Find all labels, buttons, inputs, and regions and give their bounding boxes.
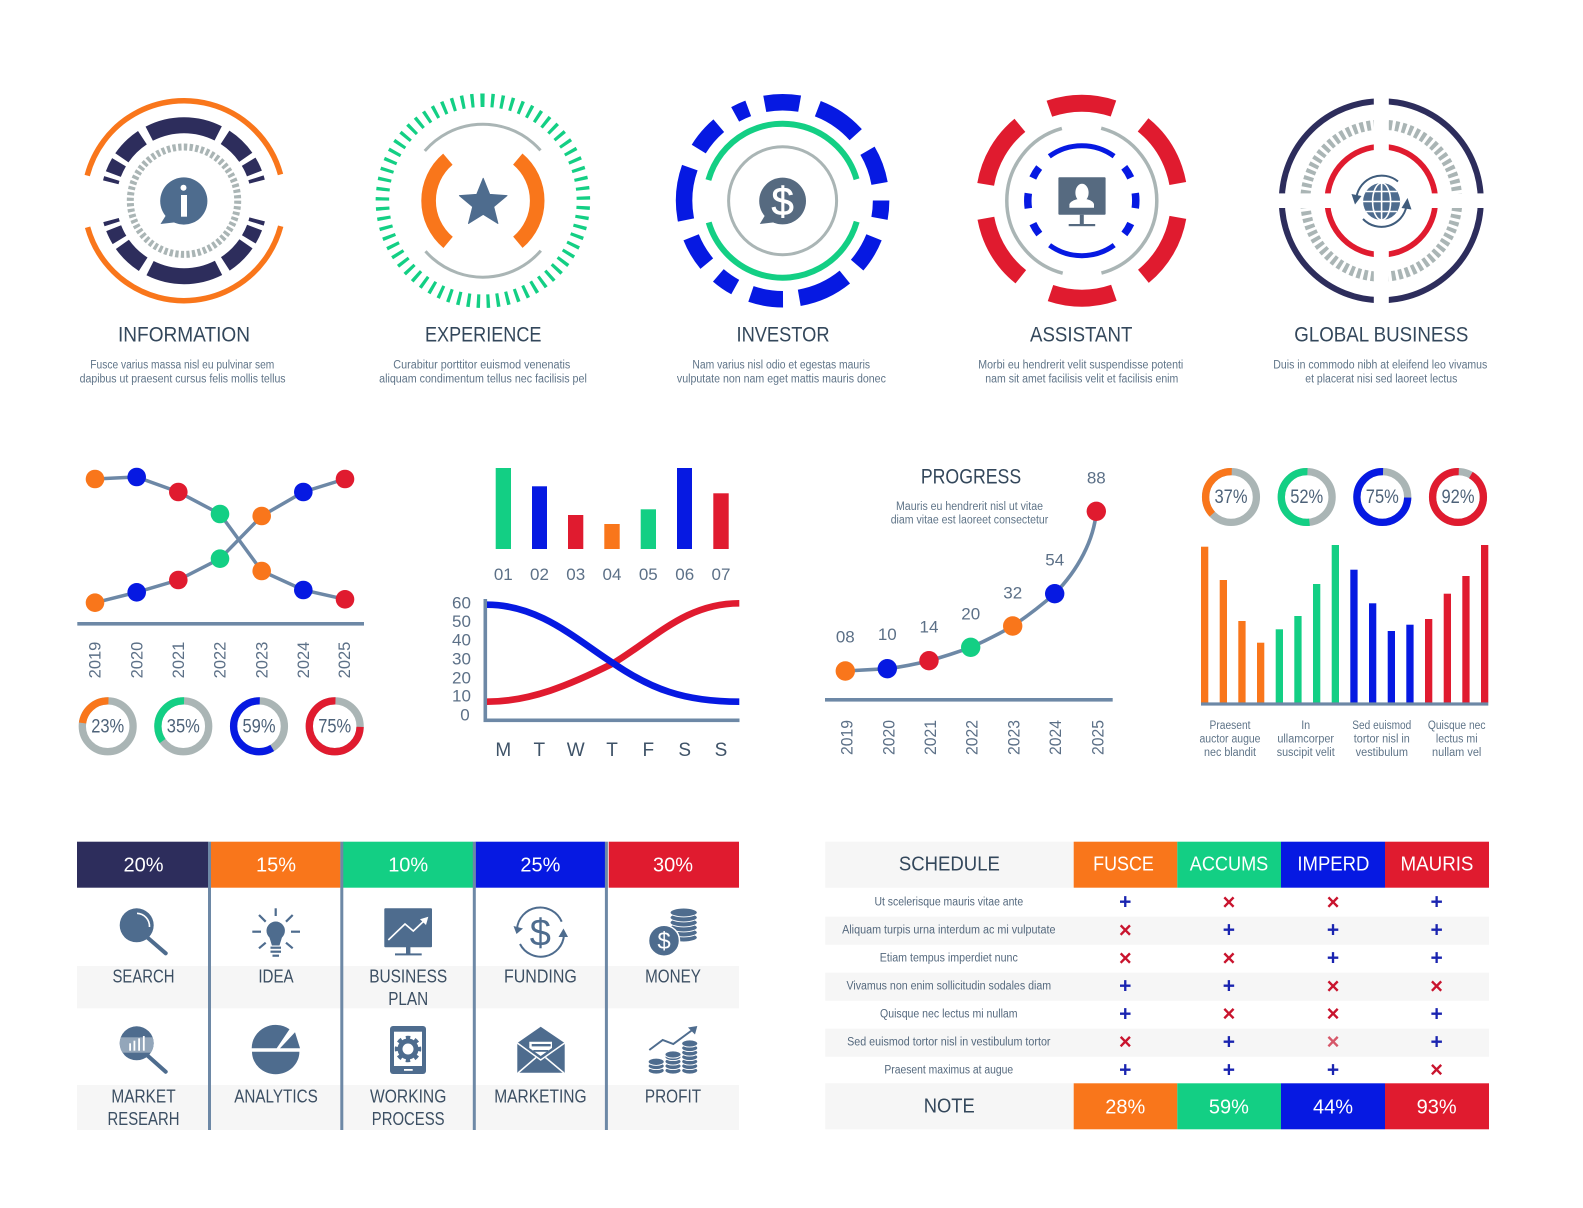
table marks: +	[1430, 1030, 1443, 1053]
chart: progress curve: 2019	[837, 720, 856, 755]
chart: progress curve: 2021	[921, 720, 940, 755]
axis labels: years: 2024	[294, 642, 313, 678]
panel: icon table	[77, 842, 739, 1130]
table row labels	[842, 897, 1056, 1076]
text: progress description	[891, 501, 1048, 526]
icon: star	[459, 178, 507, 224]
labels: icon table: PLAN	[388, 989, 428, 1009]
donuts: first row: 59%	[242, 717, 276, 738]
axis labels: years	[86, 642, 354, 678]
icon: funding: $	[530, 913, 551, 955]
ring: blue short segments	[1006, 125, 1158, 276]
ring: red segments	[958, 77, 1206, 325]
table footer: 44%	[1313, 1096, 1353, 1118]
table footer: 28%	[1105, 1096, 1146, 1118]
text: assistant description	[978, 360, 1183, 385]
icon: market research	[119, 1026, 166, 1072]
panel: investor	[668, 87, 897, 385]
table footer: 59%	[1209, 1096, 1249, 1118]
donuts: second row	[1206, 472, 1483, 522]
labels: icon table: BUSINESS	[369, 967, 447, 987]
table marks: +	[1223, 1030, 1235, 1053]
table marks: ×	[1119, 918, 1132, 942]
labels: bar chart groups: Quisque nec	[1428, 720, 1486, 732]
table header	[899, 842, 1489, 888]
table row labels: Ut scelerisque mauris vitae ante	[874, 897, 1023, 909]
chart: progress curve: 88	[1087, 468, 1106, 487]
chart: crossing line chart	[77, 468, 364, 678]
text: information description: Fusce varius massa nisl eu pulvinar sem	[90, 360, 274, 372]
chart: small bar chart	[494, 468, 730, 584]
labels: icon table: SEARCH	[112, 967, 174, 987]
labels: icon table: FUNDING	[504, 967, 577, 987]
table marks: ×	[1327, 1029, 1339, 1054]
chart: progress curve: 54	[1045, 550, 1064, 569]
donuts: second row: 52%	[1290, 487, 1323, 508]
table marks: ×	[1119, 946, 1132, 970]
labels: bar chart groups: vestibulum	[1356, 747, 1408, 759]
axis labels: years: 2021	[169, 642, 188, 678]
text: investor description	[677, 360, 886, 385]
ring: gray circle	[729, 147, 837, 255]
text: assistant description: Morbi eu hendrerit velit suspendisse potenti	[978, 360, 1183, 372]
ring: blue long arcs	[1005, 124, 1159, 278]
icon: marketing envelope	[517, 1027, 565, 1073]
table row labels: Praesent maximus at augue	[884, 1064, 1013, 1076]
panel: icon table: 15%	[256, 855, 296, 877]
donuts: first row: 23%	[91, 717, 124, 738]
chart: progress curve: 08	[836, 628, 855, 647]
ring: gray ticks	[1305, 125, 1457, 277]
table marks: +	[1430, 891, 1443, 914]
labels: icon table: PROCESS	[372, 1109, 445, 1129]
ring: green arcs	[687, 105, 878, 296]
chart: small bar chart: 01	[494, 565, 513, 584]
table marks: +	[1430, 947, 1443, 970]
table marks: +	[1327, 919, 1339, 942]
chart: weekly curves: F	[642, 740, 654, 761]
axis labels: years: 2023	[252, 642, 271, 678]
ring: orange arcs	[62, 78, 306, 323]
panel: icon table: 30%	[653, 855, 693, 877]
heading: assistant: ASSISTANT	[1030, 324, 1132, 347]
icon: business plan monitor	[384, 908, 432, 955]
panel: schedule table	[825, 842, 1489, 1129]
chart: weekly curves: 60	[452, 593, 471, 612]
icon: profit	[648, 1026, 698, 1074]
chart: weekly curves	[452, 593, 740, 761]
labels: bar chart groups	[1200, 720, 1486, 759]
labels: icon table: IDEA	[258, 967, 294, 987]
labels: bar chart groups: ullamcorper	[1277, 734, 1334, 746]
labels: icon table: RESEARH	[108, 1109, 179, 1129]
table marks: ×	[1327, 1001, 1339, 1026]
chart: weekly curves: M	[495, 740, 511, 761]
panel: global business	[1272, 90, 1492, 385]
labels: icon table: WORKING	[370, 1086, 446, 1106]
table marks: ×	[1222, 890, 1235, 914]
icon: funding	[514, 907, 568, 957]
chart: progress curve: 10	[878, 625, 897, 644]
ring: gray arcs	[1007, 126, 1157, 276]
icon: dollar bubble: $	[771, 180, 794, 224]
table marks: +	[1119, 975, 1131, 998]
icon: search	[120, 908, 166, 953]
table row labels: Etiam tempus imperdiet nunc	[880, 953, 1018, 965]
donuts: first row: 75%	[318, 717, 351, 738]
icon: money: $	[657, 928, 671, 955]
axis labels: years: 2025	[335, 642, 354, 678]
panel: assistant	[958, 77, 1206, 385]
text: investor description: Nam varius nisl odio et egestas mauris	[692, 360, 870, 372]
icon: dollar bubble	[759, 178, 806, 224]
table header: ACCUMS	[1190, 854, 1268, 876]
text: investor description: vulputate non nam eget mattis mauris donec	[677, 373, 886, 385]
chart: small bar chart: 02	[530, 565, 549, 584]
labels: icon table: MONEY	[645, 967, 701, 987]
chart: weekly curves: 40	[452, 630, 471, 650]
chart: progress curve: 20	[961, 604, 980, 623]
table marks: ×	[1119, 1029, 1132, 1054]
table marks: +	[1327, 947, 1339, 970]
heading: progress: PROGRESS	[921, 465, 1021, 488]
text: assistant description: nam sit amet facilisis velit et facilisis enim	[985, 373, 1178, 385]
chart: weekly curves: S	[715, 740, 727, 761]
icon: monitor with person	[1058, 177, 1106, 226]
text: progress description: diam vitae est laoreet consectetur	[891, 514, 1048, 526]
chart: progress curve: 2025	[1088, 720, 1107, 755]
labels: bar chart groups: tortor nisl in	[1354, 734, 1410, 746]
table header: IMPERD	[1297, 854, 1369, 876]
labels: bar chart groups: nec blandit	[1204, 747, 1257, 759]
table header: FUSCE	[1093, 854, 1154, 876]
table marks: ×	[1327, 890, 1339, 914]
text: information description: dapibus ut praesent cursus felis mollis tellus	[80, 373, 286, 385]
labels: icon table: MARKET	[111, 1086, 176, 1106]
table marks: +	[1223, 1058, 1235, 1081]
panel: experience	[375, 93, 591, 385]
chart: weekly curves: 50	[452, 612, 471, 631]
text: experience description: Curabitur porttitor euismod venenatis	[393, 360, 571, 372]
labels: bar chart groups: auctor augue	[1200, 734, 1260, 746]
labels: bar chart groups: nullam vel	[1432, 747, 1481, 759]
chart: small bar chart: 03	[566, 565, 585, 584]
chart: weekly curves: 20	[452, 668, 471, 687]
panel: icon table: 20%	[124, 855, 164, 877]
labels: icon table	[108, 967, 701, 1129]
table header: SCHEDULE	[899, 854, 1000, 876]
table marks: +	[1327, 1058, 1339, 1081]
labels: icon table: MARKETING	[494, 1086, 587, 1106]
chart: progress curve: 2022	[963, 720, 982, 755]
text: global business description: Duis in commodo nibh at eleifend leo vivamus	[1273, 360, 1488, 372]
ring: navy segments	[82, 99, 286, 302]
table row labels: Quisque nec lectus mi nullam	[880, 1008, 1018, 1020]
ring: red quadrants	[1327, 147, 1435, 255]
chart: progress curve: 2023	[1004, 720, 1023, 755]
chart: progress curve: 2020	[879, 720, 898, 755]
heading: information: INFORMATION	[118, 324, 250, 347]
donuts: second row: 92%	[1442, 487, 1475, 508]
icon: info bubble	[160, 177, 207, 225]
text: experience description: aliquam condimentum tellus nec facilisis pel	[379, 373, 587, 385]
chart: grouped bar chart	[1200, 545, 1488, 759]
table marks: ×	[1222, 1001, 1235, 1026]
table header: MAURIS	[1401, 854, 1473, 876]
labels: bar chart groups: lectus mi	[1436, 734, 1478, 746]
table marks: +	[1430, 919, 1443, 942]
chart: weekly curves: T	[606, 740, 618, 761]
panel: icon table: 25%	[520, 855, 561, 877]
labels: bar chart groups: In	[1301, 720, 1310, 732]
chart: progress curve: 14	[920, 618, 938, 637]
labels: bar chart groups: suscipit velit	[1277, 747, 1335, 759]
table marks: +	[1119, 1002, 1131, 1025]
heading: investor: INVESTOR	[736, 324, 830, 347]
chart: weekly curves: 30	[452, 650, 471, 668]
icon: idea bulb	[252, 908, 300, 956]
chart: small bar chart: 07	[712, 565, 730, 584]
chart: weekly curves: 0	[460, 706, 470, 724]
ring: gray arcs	[375, 93, 591, 309]
labels: icon table: PROFIT	[645, 1086, 701, 1106]
labels: bar chart groups: Praesent	[1210, 720, 1251, 732]
table marks	[1119, 890, 1443, 1082]
icon: money	[648, 908, 697, 956]
ring: blue segments	[668, 87, 897, 315]
chart: small bar chart: 06	[675, 565, 694, 584]
labels: icon table: ANALYTICS	[234, 1086, 318, 1106]
icon: working process tablet	[390, 1026, 426, 1074]
labels: bar chart groups: Sed euismod	[1352, 720, 1411, 732]
axis labels: years: 2019	[86, 642, 105, 678]
table marks: +	[1223, 919, 1235, 942]
table marks: ×	[1430, 1057, 1443, 1082]
ring: green ticks	[382, 100, 583, 301]
table marks: ×	[1327, 974, 1339, 998]
heading: experience: EXPERIENCE	[425, 324, 541, 347]
axis labels: years: 2020	[127, 642, 146, 678]
text: global business description: et placerat nisi sed laoreet lectus	[1305, 373, 1458, 385]
text: progress description: Mauris eu hendrerit nisl ut vitae	[896, 501, 1043, 513]
table marks: +	[1223, 975, 1235, 998]
chart: weekly curves: S	[678, 740, 691, 761]
chart: weekly curves: 10	[452, 686, 471, 706]
donuts: second row: 75%	[1366, 487, 1399, 508]
icon: analytics pie	[252, 1025, 300, 1074]
ring: gray ticks	[130, 147, 238, 254]
ring: navy quadrants	[1282, 101, 1481, 300]
table footer	[924, 1083, 1489, 1129]
chart: small bar chart: 05	[639, 565, 658, 584]
panel: information	[62, 78, 306, 385]
table marks: +	[1119, 891, 1131, 914]
text: experience description	[379, 360, 587, 385]
chart: small bar chart: 04	[603, 565, 621, 584]
text: global business description	[1273, 360, 1488, 385]
table footer: 93%	[1417, 1096, 1457, 1118]
heading: global business: GLOBAL BUSINESS	[1294, 324, 1468, 347]
chart: weekly curves: W	[567, 740, 585, 761]
chart: progress curve: 2024	[1046, 720, 1065, 755]
table marks: +	[1430, 1002, 1443, 1025]
table marks: ×	[1222, 946, 1235, 970]
table row labels: Vivamus non enim sollicitudin sodales diam	[846, 981, 1051, 993]
table row labels: Aliquam turpis urna interdum ac mi vulputate	[842, 925, 1056, 937]
panel: icon table: 10%	[388, 855, 428, 877]
table marks: ×	[1430, 974, 1443, 998]
table marks: +	[1119, 1058, 1131, 1081]
chart: progress curve: 32	[1003, 583, 1022, 602]
axis labels: years: 2022	[211, 642, 230, 678]
donuts: second row: 37%	[1214, 487, 1248, 508]
chart: weekly curves: T	[533, 740, 545, 761]
donuts: first row	[82, 701, 360, 752]
text: information description	[80, 360, 286, 385]
table footer: NOTE	[924, 1096, 975, 1118]
donuts: first row: 35%	[167, 717, 200, 738]
icon: globe with arrows	[1352, 176, 1412, 227]
ring: orange arcs	[429, 146, 537, 255]
chart: progress curve	[825, 465, 1113, 755]
table row labels: Sed euismod tortor nisl in vestibulum tortor	[847, 1036, 1051, 1048]
